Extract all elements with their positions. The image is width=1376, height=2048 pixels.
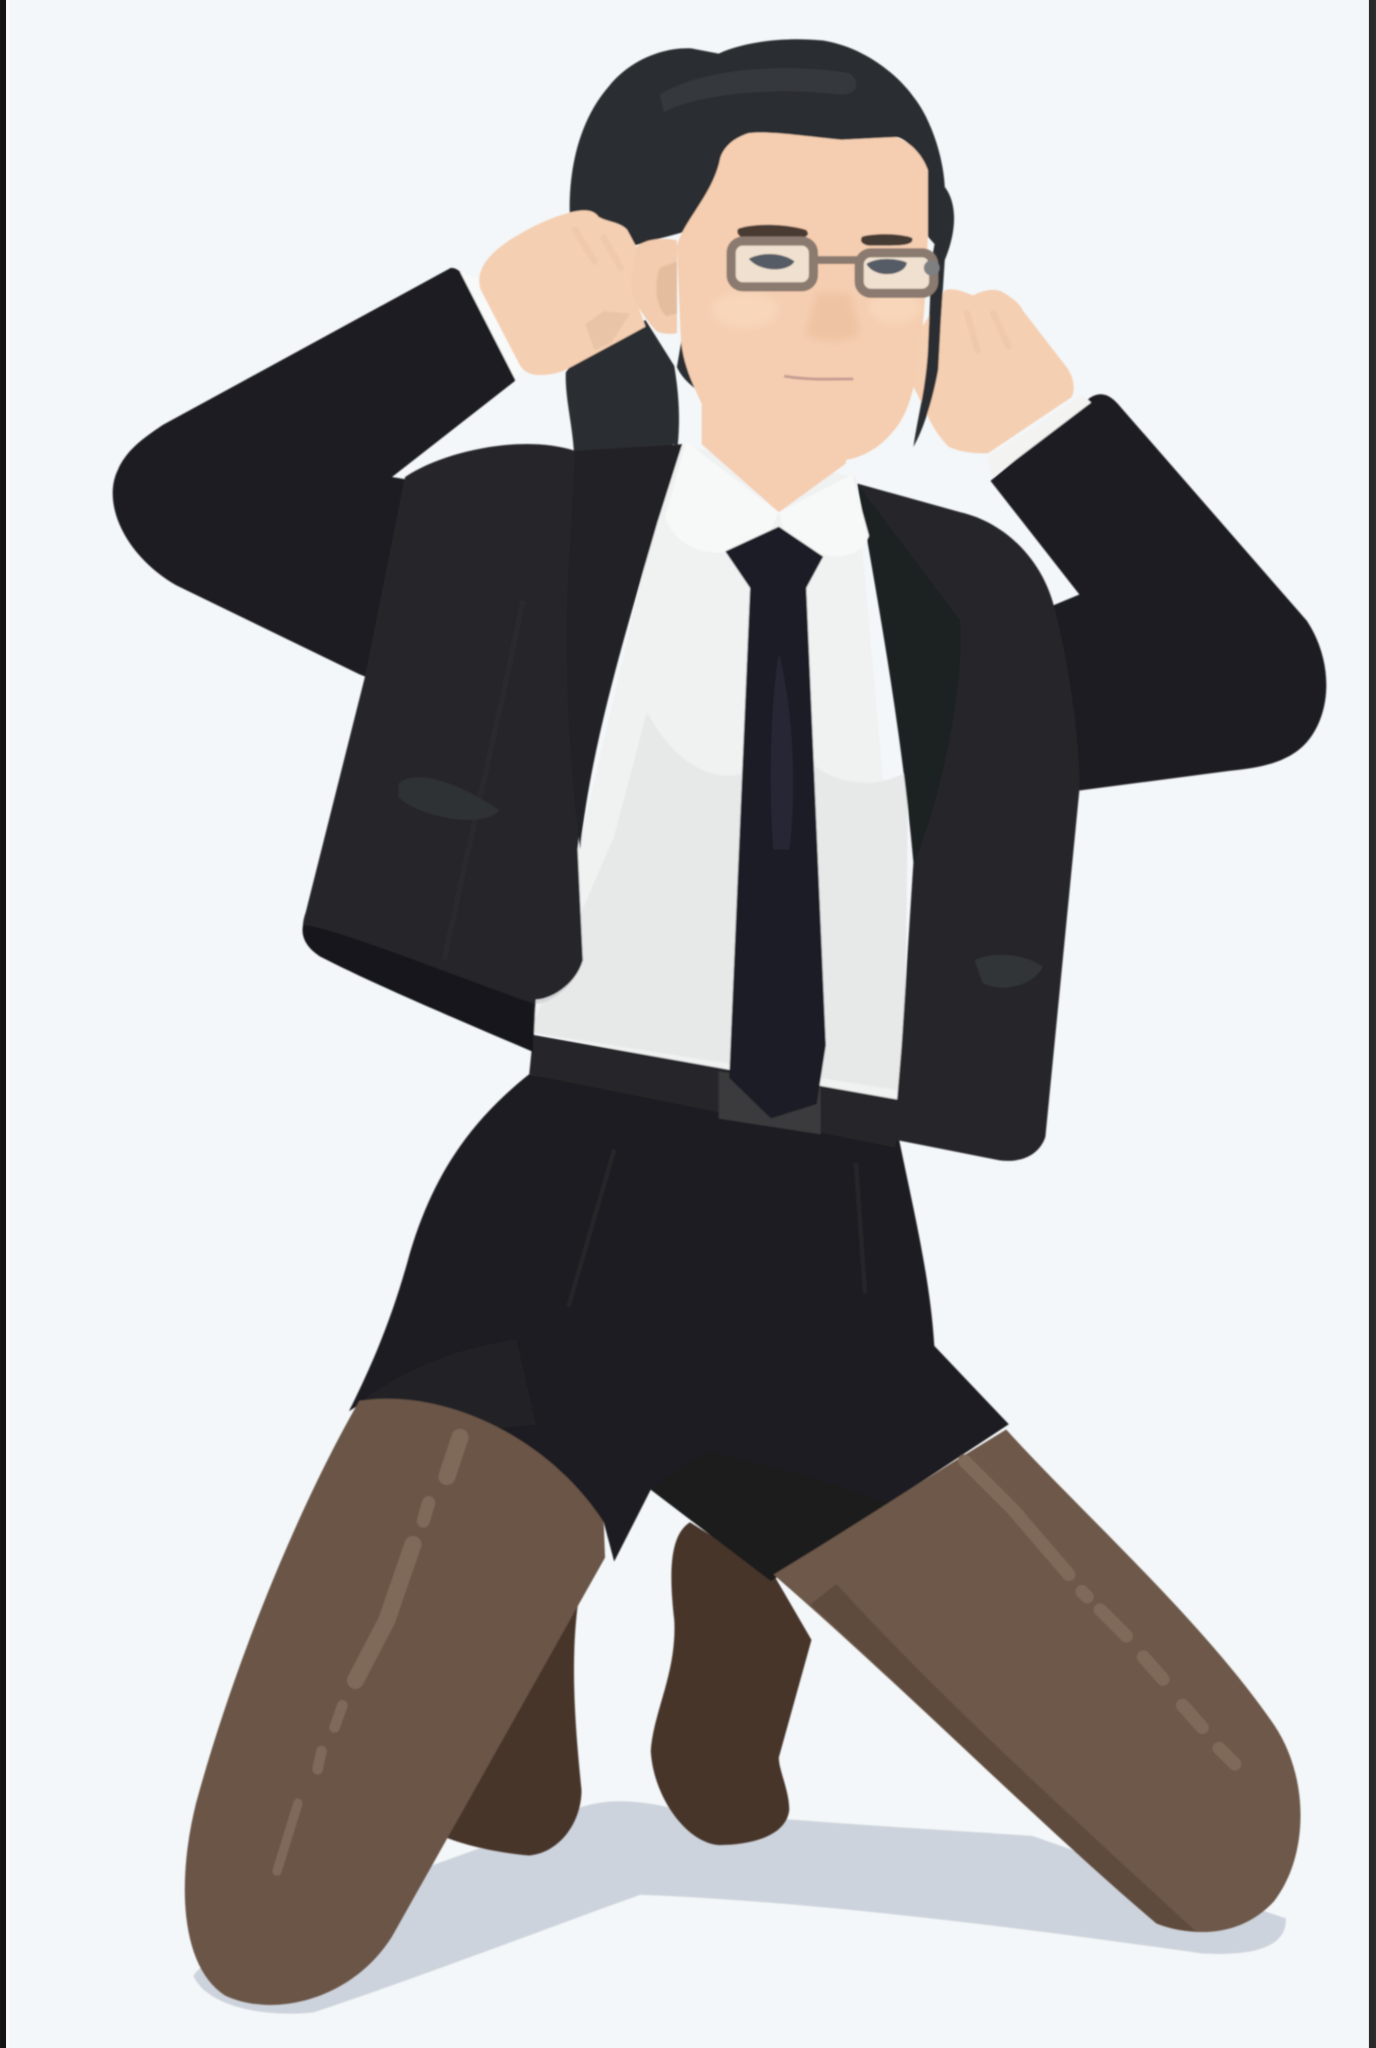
pointed hair lock bbox=[677, 314, 702, 393]
glasses bbox=[731, 241, 940, 293]
shirt bbox=[529, 444, 911, 1104]
neck bbox=[702, 392, 862, 512]
eyebrows bbox=[737, 225, 913, 246]
back foot centre bbox=[651, 1522, 811, 1845]
right cuff bbox=[987, 395, 1091, 477]
right hair strand bbox=[913, 187, 954, 447]
ear bbox=[631, 239, 677, 334]
left cuff bbox=[460, 272, 523, 382]
ground shadow bbox=[193, 1801, 1286, 2014]
jacket right panel bbox=[857, 483, 1079, 1161]
back foot left bbox=[442, 1597, 582, 1856]
right hand bbox=[913, 289, 1074, 453]
hair highlight bbox=[660, 68, 856, 112]
right arm sleeve bbox=[991, 394, 1326, 791]
right thigh bbox=[774, 1430, 1301, 1932]
mouth bbox=[785, 376, 852, 379]
nose bbox=[806, 294, 860, 341]
shirt collar bbox=[665, 442, 869, 556]
hair braid bbox=[566, 320, 679, 483]
belt bbox=[529, 1035, 902, 1147]
left hand bbox=[479, 210, 646, 375]
face bbox=[677, 133, 928, 460]
shorts bbox=[349, 1074, 1009, 1581]
left arm sleeve bbox=[113, 268, 517, 693]
hair bbox=[570, 39, 945, 248]
left thigh bbox=[185, 1399, 605, 2005]
jacket left panel bbox=[303, 444, 682, 1052]
cheeks bbox=[711, 290, 921, 328]
necktie bbox=[725, 527, 826, 1119]
